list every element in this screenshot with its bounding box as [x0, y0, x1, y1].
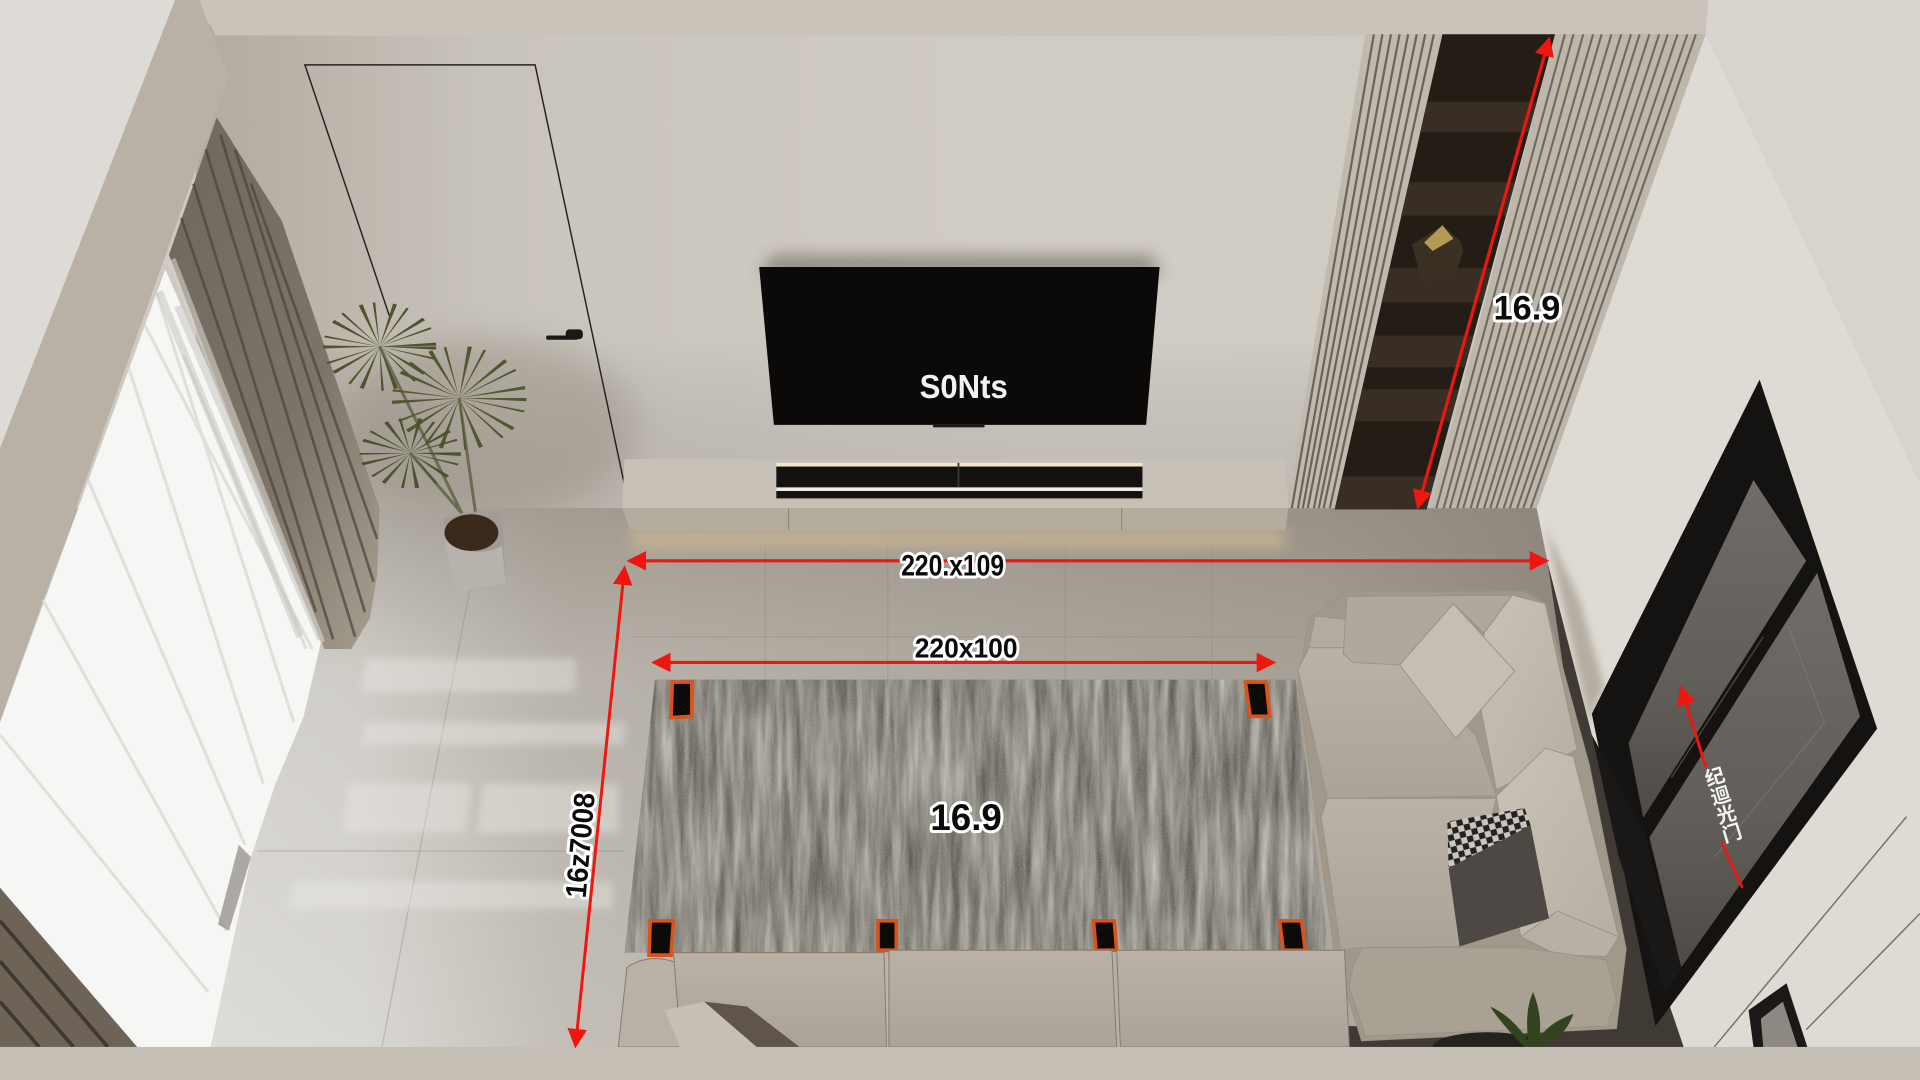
label 16.9 niche: 16.9	[1494, 290, 1560, 328]
potted plant	[351, 324, 506, 593]
window pane: left	[1629, 480, 1806, 818]
lower seat cushion	[1321, 798, 1496, 950]
floor	[0, 508, 1647, 1053]
sofa throw pillows	[665, 1002, 800, 1047]
sheer white curtain	[0, 269, 321, 1047]
hidden door	[305, 65, 624, 485]
left arm top	[1309, 616, 1347, 648]
wall panel: right slats	[1430, 34, 1706, 508]
label 16.9 on rug: 16.9	[930, 797, 1002, 838]
ceiling band	[200, 0, 1708, 36]
upper left wall	[0, 0, 175, 448]
window with black frame	[1592, 380, 1877, 1026]
soundbar	[776, 463, 1142, 498]
tv screen text: S0Nts	[920, 369, 1008, 406]
speaker: front 3	[1093, 921, 1117, 950]
right wall	[1537, 34, 1920, 1080]
left wall ledge	[0, 0, 229, 722]
sectional sofa: right side	[1298, 591, 1626, 1041]
upper seat cushion	[1298, 648, 1496, 798]
front sofa end	[1349, 948, 1616, 1036]
dimension: room depth	[560, 568, 624, 1046]
label 220x100: 220x100	[915, 633, 1018, 664]
wall-mounted tv	[759, 267, 1160, 427]
sofa base	[1298, 591, 1626, 1041]
checkered pillow	[1447, 808, 1531, 868]
speaker: front 2	[878, 921, 896, 950]
wall shadow beside window	[1545, 527, 1604, 722]
back wall	[196, 24, 1714, 527]
dimension: window	[1681, 688, 1744, 888]
window label: 纪迴光门	[1699, 764, 1744, 847]
dark pillow	[1449, 825, 1549, 947]
under-console glow	[631, 529, 1286, 549]
back cushion top	[1343, 595, 1512, 665]
diamond pillow	[1400, 604, 1515, 738]
tv shadow	[759, 255, 1163, 276]
wall shadow behind plant	[343, 337, 637, 520]
dark plinth behind right sofa	[1347, 563, 1684, 1047]
door handle	[546, 329, 583, 340]
rug	[618, 673, 1335, 958]
speaker: rear right	[1245, 682, 1270, 716]
right arm cushion	[1496, 748, 1619, 956]
upper right wall	[1706, 0, 1920, 484]
speaker: rear left	[671, 682, 692, 718]
shelving niche	[1322, 34, 1567, 509]
speaker: front 4	[1280, 921, 1305, 950]
shelf ornament	[1412, 225, 1463, 284]
drapes: dark side curtain	[169, 118, 380, 649]
wall panel: left slats	[1287, 34, 1442, 508]
speaker: front 1	[649, 921, 673, 955]
sofa seat 1	[673, 953, 887, 1047]
cabinet handle	[1749, 983, 1807, 1047]
cabinet lines	[1714, 817, 1920, 1047]
sofa seat 2	[889, 950, 1117, 1047]
small side plant	[1433, 992, 1573, 1062]
dimension: niche height	[1418, 39, 1560, 507]
media console	[622, 459, 1288, 530]
sofa left arm	[618, 959, 681, 1047]
bottom wall band	[0, 1047, 1920, 1080]
black marble strip	[1592, 735, 1681, 994]
bottom left curtain	[0, 888, 137, 1047]
right back cushion	[1480, 595, 1577, 790]
window pane: right	[1649, 573, 1860, 967]
sofa seat 3	[1117, 950, 1349, 1047]
sectional sofa: bottom	[618, 950, 1349, 1047]
label 220.x109: 220.x109	[901, 550, 1004, 583]
rug speakers	[649, 682, 1305, 955]
label 16z7008: 16z7008	[560, 791, 602, 899]
plant pot	[443, 512, 506, 593]
